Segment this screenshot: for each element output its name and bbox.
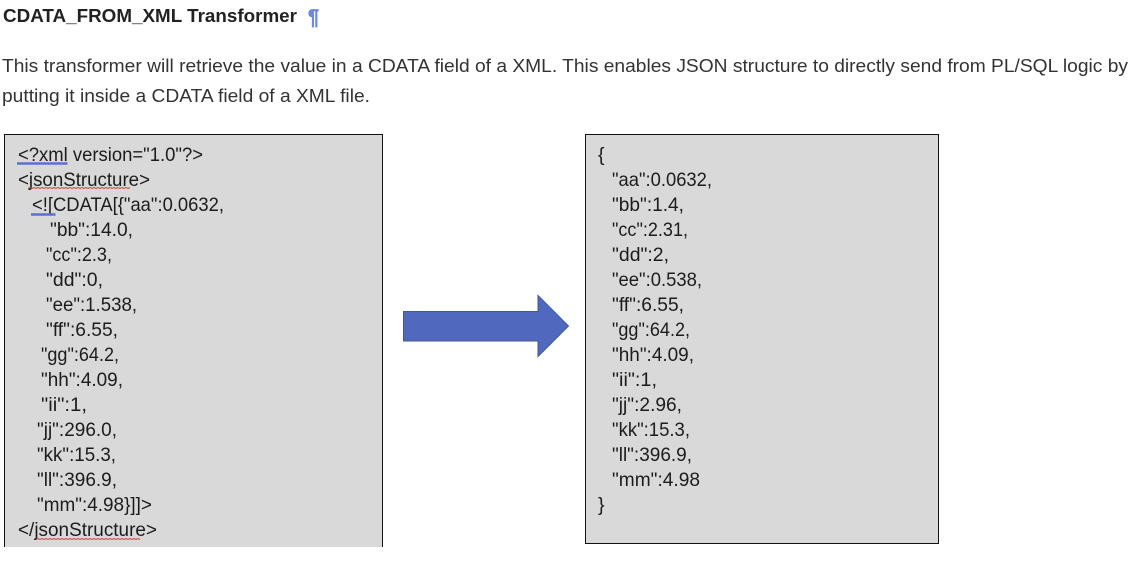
panel: XML source: <![CDATA[{"aa":0.0632, bbox=[32, 194, 224, 216]
panel: XML source: "cc":2.3, bbox=[46, 244, 112, 266]
panel: JSON output: "ff":6.55, bbox=[612, 294, 684, 316]
panel: JSON output: { bbox=[598, 144, 605, 166]
description text bbox=[2, 55, 1129, 106]
panel: JSON output: "gg":64.2, bbox=[612, 319, 690, 341]
panel: XML source: "ll":396.9, bbox=[37, 469, 117, 491]
panel: XML source: "ii":1, bbox=[41, 394, 87, 416]
panel: JSON output: "dd":2, bbox=[612, 244, 669, 266]
panel: JSON output: "ee":0.538, bbox=[612, 269, 702, 291]
panel: XML source: <jsonStructure> bbox=[18, 169, 150, 191]
panel: XML source: "hh":4.09, bbox=[41, 369, 123, 391]
panel: JSON output: "jj":2.96, bbox=[612, 394, 682, 416]
panel: XML source: <?xml version="1.0"?> bbox=[18, 144, 203, 166]
panel: XML source: "gg":64.2, bbox=[41, 344, 119, 366]
panel: XML source: "ee":1.538, bbox=[46, 294, 137, 316]
title: ¶ bbox=[308, 6, 319, 29]
panel: XML source: "bb":14.0, bbox=[50, 219, 133, 241]
description text: This transformer will retrieve the value in a CDATA field of a XML. This enables JSON structure to directly send from PL/SQL logic by bbox=[2, 55, 1129, 76]
description text: putting it inside a CDATA field of a XML file. bbox=[2, 85, 370, 106]
panel: XML source: "ff":6.55, bbox=[46, 319, 118, 341]
panel: XML source bbox=[4, 134, 382, 547]
panel: JSON output bbox=[586, 134, 938, 544]
panel: JSON output: "ii":1, bbox=[612, 369, 657, 391]
panel: XML source: </jsonStructure> bbox=[18, 519, 157, 541]
panel: XML source: "jj":296.0, bbox=[37, 419, 117, 441]
panel: XML source: "dd":0, bbox=[46, 269, 103, 291]
title: CDATA_FROM_XML Transformer bbox=[3, 5, 297, 26]
panel: JSON output: "hh":4.09, bbox=[612, 344, 694, 366]
panel: XML source: "mm":4.98}]]> bbox=[37, 494, 152, 516]
arrow bbox=[404, 296, 568, 356]
panel: JSON output: "cc":2.31, bbox=[612, 219, 688, 241]
panel: JSON output: } bbox=[598, 494, 605, 516]
panel: JSON output: "bb":1.4, bbox=[612, 194, 684, 216]
panel: JSON output: "aa":0.0632, bbox=[612, 169, 712, 191]
panel: JSON output: "mm":4.98 bbox=[612, 469, 700, 491]
panel: XML source: "kk":15.3, bbox=[37, 444, 116, 466]
panel: JSON output: "kk":15.3, bbox=[612, 419, 690, 441]
panel: JSON output: "ll":396.9, bbox=[612, 444, 692, 466]
